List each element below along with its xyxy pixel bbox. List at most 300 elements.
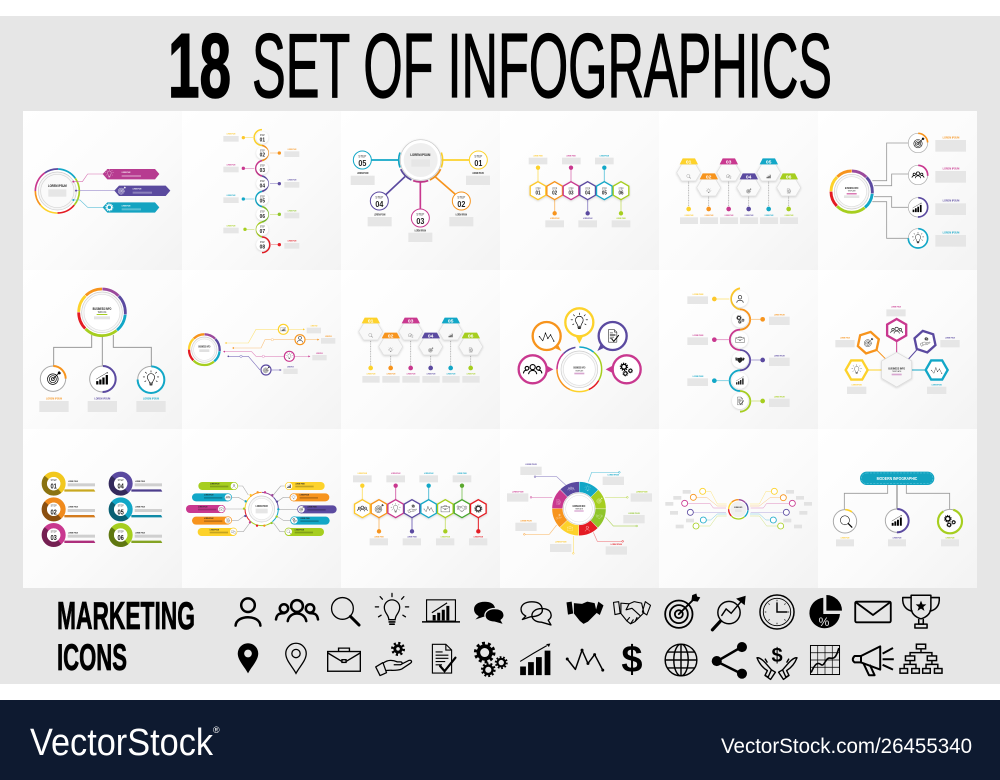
captions: LOREM IPSUM [287,367,294,369]
captions: LOREM IPSUM [387,374,396,376]
step labels: STEP [260,150,265,152]
stems and dots [712,297,765,403]
segmented circle [35,169,79,213]
captions: LOREM IPSUM [68,507,78,509]
captions [283,326,335,374]
hexagon numbers: 01 [535,191,541,197]
small nodes [240,338,273,357]
cap numbers: 06 [786,174,792,180]
cap numbers: 05 [448,318,454,324]
captions: LOREM IPSUM [325,336,332,338]
circuit lines [688,491,789,526]
step labels: 01 [260,137,265,143]
step captions: LOREM IPSUM [227,164,236,166]
spokes [371,138,471,210]
captions: LOREM IPSUM [943,166,960,170]
pill text: LOREM IPSUM [300,495,309,497]
hexagon numbers [535,188,624,197]
heading: marketing icons: MARKETING [57,595,195,638]
cap numbers: 06 [468,333,474,339]
captions: LOREM IPSUM [785,215,794,217]
captions: LOREM IPSUM [608,474,619,476]
captions: LOREM IPSUM [705,215,714,217]
step labels: 03 [260,168,265,174]
heading: marketing icons: ICONS [57,637,127,678]
central ring [557,347,602,392]
captions: LOREM IPSUM [946,537,955,539]
node bars [885,509,909,532]
segmented circle: LOREM IPSUM [48,184,67,188]
dashed stems [371,339,471,366]
coloured caps [680,158,798,179]
ribbon 1 [103,169,159,179]
cap numbers: 03 [726,159,732,165]
step numbers [50,478,124,542]
node search [833,510,857,533]
central ring: BUSINESS INFO [93,307,112,311]
ribbon 3: LOREM IPSUM [122,205,131,207]
underline tabs [64,489,162,543]
captions: LOREM IPSUM [415,230,426,232]
step badges [256,132,268,251]
centre discs [47,477,127,542]
step captions: LOREM IPSUM [227,134,236,136]
captions [529,155,630,227]
captions: LOREM IPSUM [600,155,609,157]
captions: LOREM IPSUM [616,218,626,220]
captions: LOREM IPSUM [611,544,622,546]
cell icons [369,333,473,352]
circuit lines [224,329,318,370]
step labels: STEP [260,181,265,183]
captions [68,481,162,538]
step labels: 08 [260,244,265,250]
panel: ribbon diagram [23,111,182,270]
captions: LOREM IPSUM [311,326,318,328]
step numbers: STEP [375,195,384,199]
hub circle [400,140,441,180]
panel: twelve-node circuit map [659,429,818,588]
donut [557,487,601,530]
cap numbers: 03 [408,318,414,324]
dollar on hands icon: $ [771,645,783,667]
hexagon numbers: 03 [568,191,574,197]
captions: LOREM IPSUM [841,537,850,539]
captions: LOREM IPSUM [893,537,902,539]
ribbon 2: LOREM IPSUM [133,189,142,191]
hub: LOREM IPSUM [256,506,268,508]
panel: capped hexagon columns [659,111,818,270]
step labels: STEP [260,166,265,168]
captions: LOREM IPSUM [533,155,543,157]
hexagon cells [359,323,483,355]
footer bar [0,700,1000,780]
pill text: LOREM IPSUM [295,483,305,485]
hexagon numbers: STEP [552,188,558,190]
captions: LOREM IPSUM [945,338,955,340]
cap numbers: 02 [706,174,712,180]
captions: LOREM IPSUM [555,542,567,544]
step numbers: 02 [50,509,57,516]
captions: LOREM IPSUM [693,335,704,337]
icon node 2 [908,165,928,185]
step numbers: 01 [474,158,482,168]
step numbers: STEP [118,504,124,508]
icon node 1 [908,133,928,153]
captions: LOREM IPSUM [358,473,367,475]
captions: LOREM IPSUM [391,473,401,475]
captions: LOREM IPSUM [932,384,942,386]
captions: LOREM IPSUM [374,536,384,538]
step numbers: STEP [51,478,57,482]
pill text: LOREM IPSUM [300,518,310,520]
pill text: LOREM IPSUM [295,529,304,531]
panel: six-step rings [23,429,182,588]
captions: LOREM IPSUM [94,396,111,400]
captions: LOREM IPSUM [407,374,416,376]
central ring: TEMPLATE [848,190,856,193]
icon nodes [261,324,305,375]
step nodes [353,151,487,227]
step captions [223,134,299,249]
captions: LOREM IPSUM [520,520,532,522]
footer logo: VectorStock [30,722,214,764]
node icons [263,327,303,373]
node dots [686,207,791,211]
ribbon 1: LOREM IPSUM [122,172,131,174]
central ring: TEMPLATE [575,369,584,372]
connectors [225,486,297,532]
captions: LOREM IPSUM [424,473,434,475]
step labels: 04 [260,183,266,189]
panel: modern infographic tree [818,429,977,588]
captions: LOREM IPSUM [840,338,850,340]
hub circle: LOREM IPSUM [410,152,431,157]
icon node bars [90,366,116,392]
donut centre: BUSINESS INFO [573,504,585,508]
captions: LOREM IPSUM [774,396,785,398]
icon node target [40,366,66,391]
hexagon numbers: STEP [568,188,574,190]
icon row one [236,593,939,630]
step labels: STEP [260,135,265,137]
arrow tips [223,328,319,371]
footer logo: ® [213,725,220,735]
title [168,16,832,117]
hexagon numbers: STEP [618,188,624,190]
step captions: LOREM IPSUM [288,180,297,182]
step numbers: STEP [118,478,124,482]
coloured caps [362,318,480,338]
donut centre [563,493,595,524]
cap numbers [686,159,792,180]
node dots [368,366,473,370]
segment icons [556,485,603,531]
hexagon cells [677,164,801,196]
cell icons [687,174,791,193]
captions: LOREM IPSUM [407,536,417,538]
stems and dots [242,136,281,246]
panel: business info tree down [23,270,182,429]
outer hexagons [843,319,950,384]
captions: LOREM IPSUM [456,214,467,216]
step labels: 06 [260,214,265,220]
captions: LOREM IPSUM [943,135,960,139]
callout lines [524,472,637,553]
pill text: LOREM IPSUM [210,483,220,485]
captions: LOREM IPSUM [566,155,576,157]
panel: hexagon hub [818,270,977,429]
donut centre: TEMPLATE [575,507,584,510]
centre hexagon: TEMPLATE [892,370,902,373]
step numbers: STEP [358,154,367,158]
panel: ten pill labels around hub [182,429,341,588]
pill text: LOREM IPSUM [204,495,214,497]
step labels: STEP [260,242,265,244]
step numbers: 03 [416,216,424,226]
central ring: BUSINESS INFO [198,347,210,349]
cap numbers: 02 [388,333,394,339]
cap numbers: 04 [428,333,434,339]
step numbers: 04 [375,199,383,209]
captions [507,464,652,555]
hexagon icons [852,327,942,374]
rings [44,474,130,544]
captions: LOREM IPSUM [441,536,450,538]
balloon icons [523,313,633,376]
step labels: STEP [260,196,265,198]
pill text: LOREM IPSUM [198,506,208,508]
icon row two [238,642,942,679]
captions: LOREM IPSUM [135,507,145,509]
captions [351,173,490,242]
step numbers: STEP [51,504,57,508]
captions: LOREM IPSUM [357,173,368,175]
centre hexagon [882,352,912,387]
captions [680,215,798,224]
captions [362,374,480,383]
captions: LOREM IPSUM [472,173,484,175]
central ring: BUSINESS INFO [845,186,859,190]
captions: LOREM IPSUM [550,218,560,220]
captions: LOREM IPSUM [583,218,593,220]
pie percent sign: % [819,615,830,629]
step numbers: 03 [50,535,57,542]
panel: eight-step hexagon row [341,429,500,588]
step labels: 07 [260,229,265,235]
ring shading [44,474,130,544]
balloons [519,308,641,383]
captions [935,135,966,247]
centre hexagon: BUSINESS INFO [888,366,905,370]
hub [729,500,748,519]
captions: LOREM IPSUM [447,374,456,376]
central ring: BUSINESS INFO [573,366,585,370]
captions: LOREM IPSUM [316,353,323,355]
step labels [260,135,266,250]
connectors [73,174,115,207]
captions: LOREM IPSUM [68,481,78,483]
dashed stems [689,180,789,207]
step numbers: 06 [117,535,124,542]
hexagon numbers: 04 [585,191,590,197]
captions: LOREM IPSUM [765,215,774,217]
step numbers: STEP [51,529,57,533]
captions: LOREM IPSUM [367,374,376,376]
captions: LOREM IPSUM [512,491,524,493]
hub [245,492,278,526]
captions [687,294,790,407]
hexagon numbers: STEP [585,188,591,190]
hub dots [243,491,279,527]
cap numbers: 05 [766,159,772,165]
hexagons [530,182,629,200]
pill lines [198,486,326,533]
heading pill [860,472,934,485]
icon node bulb [138,366,164,393]
footer id: VectorStock.com/26455340 [721,735,972,758]
captions [835,307,960,394]
step captions: LOREM IPSUM [227,226,236,228]
captions: LOREM IPSUM [774,314,785,316]
step numbers: 05 [358,158,366,168]
captions: LOREM IPSUM [135,481,145,483]
node gears [938,509,962,533]
captions: LOREM IPSUM [943,230,960,234]
hexagon numbers: STEP [602,188,607,190]
icon node 3 [908,198,928,217]
captions [836,537,959,546]
panel: circuit lines [182,270,341,429]
step captions: LOREM IPSUM [288,149,297,151]
captions: LOREM IPSUM [745,215,754,217]
captions: LOREM IPSUM [467,374,476,376]
captions: LOREM IPSUM [68,532,78,534]
stems and dots [360,483,480,533]
captions: LOREM IPSUM [628,513,640,515]
step numbers: 01 [50,484,57,491]
tiny captions [665,490,812,528]
step numbers: 04 [117,484,124,491]
wave arcs [730,288,750,412]
cap numbers [368,318,474,339]
captions: LOREM IPSUM [374,214,385,216]
hexagons [355,500,486,518]
pill text [198,483,317,531]
captions: LOREM IPSUM [143,396,160,400]
ribbon 2 [114,186,170,196]
captions: LOREM IPSUM [725,215,734,217]
panel: capped hexagon columns two [341,270,500,429]
central ring [79,289,125,336]
step captions: LOREM IPSUM [288,210,297,212]
captions: LOREM IPSUM [135,532,145,534]
step numbers [358,154,483,226]
step labels: STEP [260,227,265,229]
hexagon numbers: 05 [602,191,607,197]
step labels: 02 [260,153,265,159]
hub: BUSINESS INFO [734,507,743,509]
step captions: LOREM IPSUM [288,241,297,243]
wave arcs [254,130,270,253]
pill text: LOREM IPSUM [210,529,219,531]
panel: eight-step wave timeline [182,111,341,270]
captions: LOREM IPSUM [636,491,648,493]
captions: LOREM IPSUM [474,536,483,538]
step numbers: STEP [118,529,124,533]
icon node 4 [908,229,928,248]
captions [353,473,487,545]
badge icons [735,295,745,405]
pill icons [219,484,304,534]
cap numbers: 01 [686,159,692,165]
captions: LOREM IPSUM [685,215,694,217]
connector lines [872,143,908,238]
panel: five-step hub [341,111,500,270]
step captions: LOREM IPSUM [227,195,236,197]
captions: LOREM IPSUM [46,396,63,400]
panel: speech balloons around hub [500,270,659,429]
captions [39,396,166,412]
panel: donut with callouts [500,429,659,588]
connector lines [54,335,151,367]
pill text: LOREM IPSUM [307,507,317,509]
step numbers: STEP [474,154,483,158]
step labels: STEP [260,212,265,214]
captions: LOREM IPSUM [525,464,537,466]
pills [186,482,337,536]
panel: six-step hexagon row [500,111,659,270]
step numbers: 05 [117,509,124,516]
central ring: TEMPLATE [98,311,107,314]
spokes [868,341,926,370]
panel: business info tree right [818,111,977,270]
connector lines [844,485,950,509]
ribbon 3 [103,202,159,213]
captions: LOREM IPSUM [943,199,960,203]
captions: LOREM IPSUM [427,374,436,376]
cap numbers: 01 [368,318,374,324]
central ring [831,171,872,212]
step numbers: 02 [457,199,465,209]
captions: LOREM IPSUM [774,355,785,357]
stems and dots [536,165,623,215]
callout end dots [523,471,637,554]
captions: LOREM IPSUM [693,294,704,296]
central ring [189,334,220,365]
icon nodes [682,488,795,529]
heading pill: MODERN INFOGRAPHIC [877,476,918,481]
hexagon numbers: 02 [552,191,557,197]
dollar icon: $ [621,639,643,681]
hexagon numbers: STEP [535,188,541,190]
panel: six-step icon wave [659,270,818,429]
captions: LOREM IPSUM [693,376,704,378]
step numbers: STEP [416,212,425,216]
pointers [547,336,613,373]
title: 18 [168,16,231,117]
white badges [732,291,748,409]
captions: LOREM IPSUM [457,473,467,475]
captions: LOREM IPSUM [852,384,862,386]
pill icon discs [218,482,305,535]
captions: LOREM IPSUM [891,307,901,309]
pill text: LOREM IPSUM [204,518,214,520]
step labels: 05 [260,199,265,205]
hexagon icons [357,503,482,513]
hexagon numbers: 06 [618,191,624,197]
cap numbers: 04 [746,174,752,180]
